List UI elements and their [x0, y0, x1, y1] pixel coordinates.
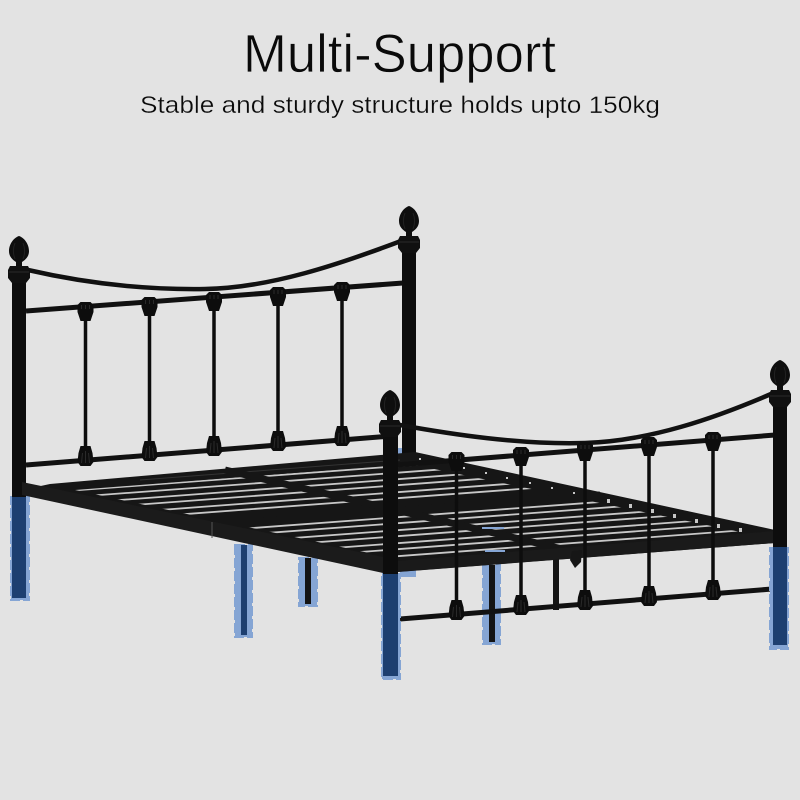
head right finial [398, 206, 420, 253]
foot lower rail [400, 589, 772, 619]
back rail edge highlight [140, 460, 400, 480]
slat shadow lines [212, 470, 600, 552]
head left finial [8, 236, 30, 283]
foot right leg core [773, 547, 787, 645]
title: Multi-Support [243, 24, 556, 84]
head lower knuckles [78, 426, 350, 466]
footboard [379, 360, 791, 679]
foot upper knuckles [448, 432, 721, 471]
foot left finial [379, 390, 401, 437]
foot top curved rail [400, 394, 771, 443]
subtitle: Stable and sturdy structure holds upto 150kg [140, 92, 660, 119]
head upper knuckles [78, 282, 350, 321]
blue legs seen through slats [482, 527, 505, 552]
highlighted support legs [11, 448, 559, 644]
foot rail [396, 531, 775, 572]
bed illustration [0, 206, 800, 679]
head lower rail [26, 436, 392, 465]
head left post [12, 275, 26, 497]
foot left leg core [383, 573, 398, 676]
foot lower knuckles [448, 580, 721, 620]
foot right finial [769, 360, 791, 407]
slat highlights [75, 466, 738, 558]
head spindles [86, 291, 342, 456]
platform base [22, 452, 775, 572]
foot right leg highlight [770, 548, 788, 649]
foot upper rail [396, 435, 775, 465]
foot spindles [456, 441, 713, 610]
side rail joint [211, 522, 213, 538]
head upper rail [26, 283, 403, 311]
foot left leg highlight [382, 574, 400, 679]
front-left side rail [22, 482, 398, 573]
foot left post [383, 425, 398, 574]
right side rail slat tabs [419, 458, 742, 532]
head top curved rail [28, 241, 401, 289]
foot right post [773, 395, 787, 547]
center bracket [570, 550, 582, 568]
headboard [8, 206, 420, 497]
head right post [402, 245, 416, 459]
